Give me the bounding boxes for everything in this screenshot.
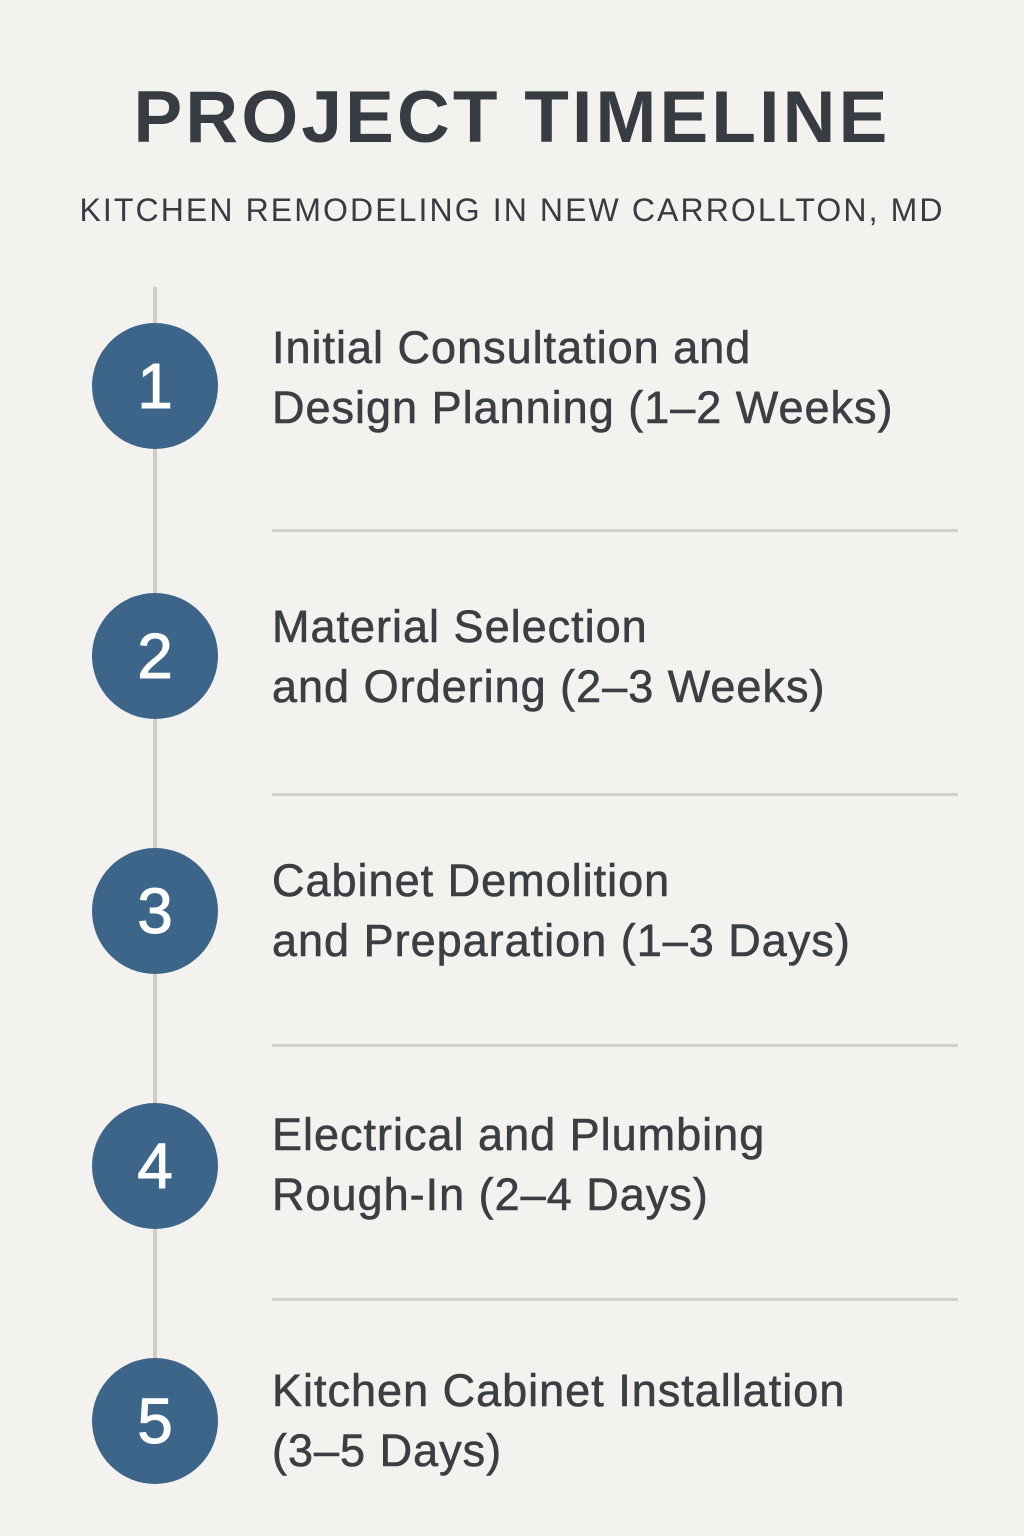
- step 5 text: [272, 1365, 845, 1476]
- step 3 circle: [92, 848, 218, 974]
- step 1 text: [272, 322, 894, 433]
- step 3 text: [272, 855, 851, 966]
- step 2 circle: [92, 593, 218, 719]
- step 2 text: and Ordering (2–3 Weeks): [272, 661, 825, 712]
- step 3 text: and Preparation (1–3 Days): [272, 915, 851, 966]
- step 5 circle: [92, 1358, 218, 1484]
- step 5 text: Kitchen Cabinet Installation: [272, 1365, 845, 1416]
- step 4 text: Rough-In (2–4 Days): [272, 1169, 709, 1220]
- title: PROJECT TIMELINE: [134, 77, 890, 158]
- step 5 text: (3–5 Days): [272, 1425, 502, 1476]
- step 4 circle: 4: [137, 1130, 173, 1202]
- step 2 text: [272, 601, 825, 712]
- step 1 circle: 1: [137, 350, 173, 422]
- step 2 text: Material Selection: [272, 601, 648, 652]
- step 3 circle: 3: [137, 875, 173, 947]
- step 3 text: Cabinet Demolition: [272, 855, 670, 906]
- subtitle: KITCHEN REMODELING IN NEW CARROLLTON, MD: [79, 192, 945, 228]
- step 2 circle: 2: [137, 620, 173, 692]
- step 1 text: Design Planning (1–2 Weeks): [272, 382, 894, 433]
- step 4 text: [272, 1109, 765, 1220]
- step 4 text: Electrical and Plumbing: [272, 1109, 765, 1160]
- step 5 circle: 5: [137, 1385, 173, 1457]
- step 4 circle: [92, 1103, 218, 1229]
- step 1 text: Initial Consultation and: [272, 322, 751, 373]
- timeline vertical line: [153, 287, 157, 1421]
- step 1 circle: [92, 323, 218, 449]
